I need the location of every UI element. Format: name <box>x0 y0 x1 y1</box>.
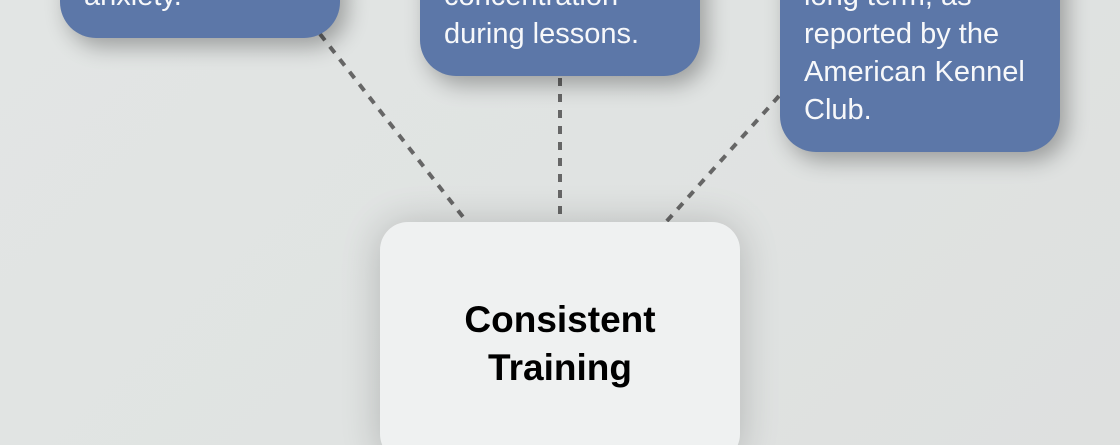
text: right card <box>804 0 1025 126</box>
panel: right benefit card <box>780 0 1060 152</box>
heading: Consistent Training: Consistent <box>464 299 656 340</box>
panel: middle benefit card <box>420 0 700 76</box>
text: middle card <box>444 0 639 50</box>
text: right card: Club. <box>804 94 872 126</box>
text: middle card: during lessons. <box>444 18 639 50</box>
text: right card: reported by the <box>804 18 999 50</box>
panel: central node <box>380 222 740 445</box>
heading: Consistent Training: Training <box>488 347 632 388</box>
text: right card: American Kennel <box>804 56 1025 88</box>
heading: Consistent Training <box>464 299 656 388</box>
panel: left benefit card <box>60 0 340 38</box>
